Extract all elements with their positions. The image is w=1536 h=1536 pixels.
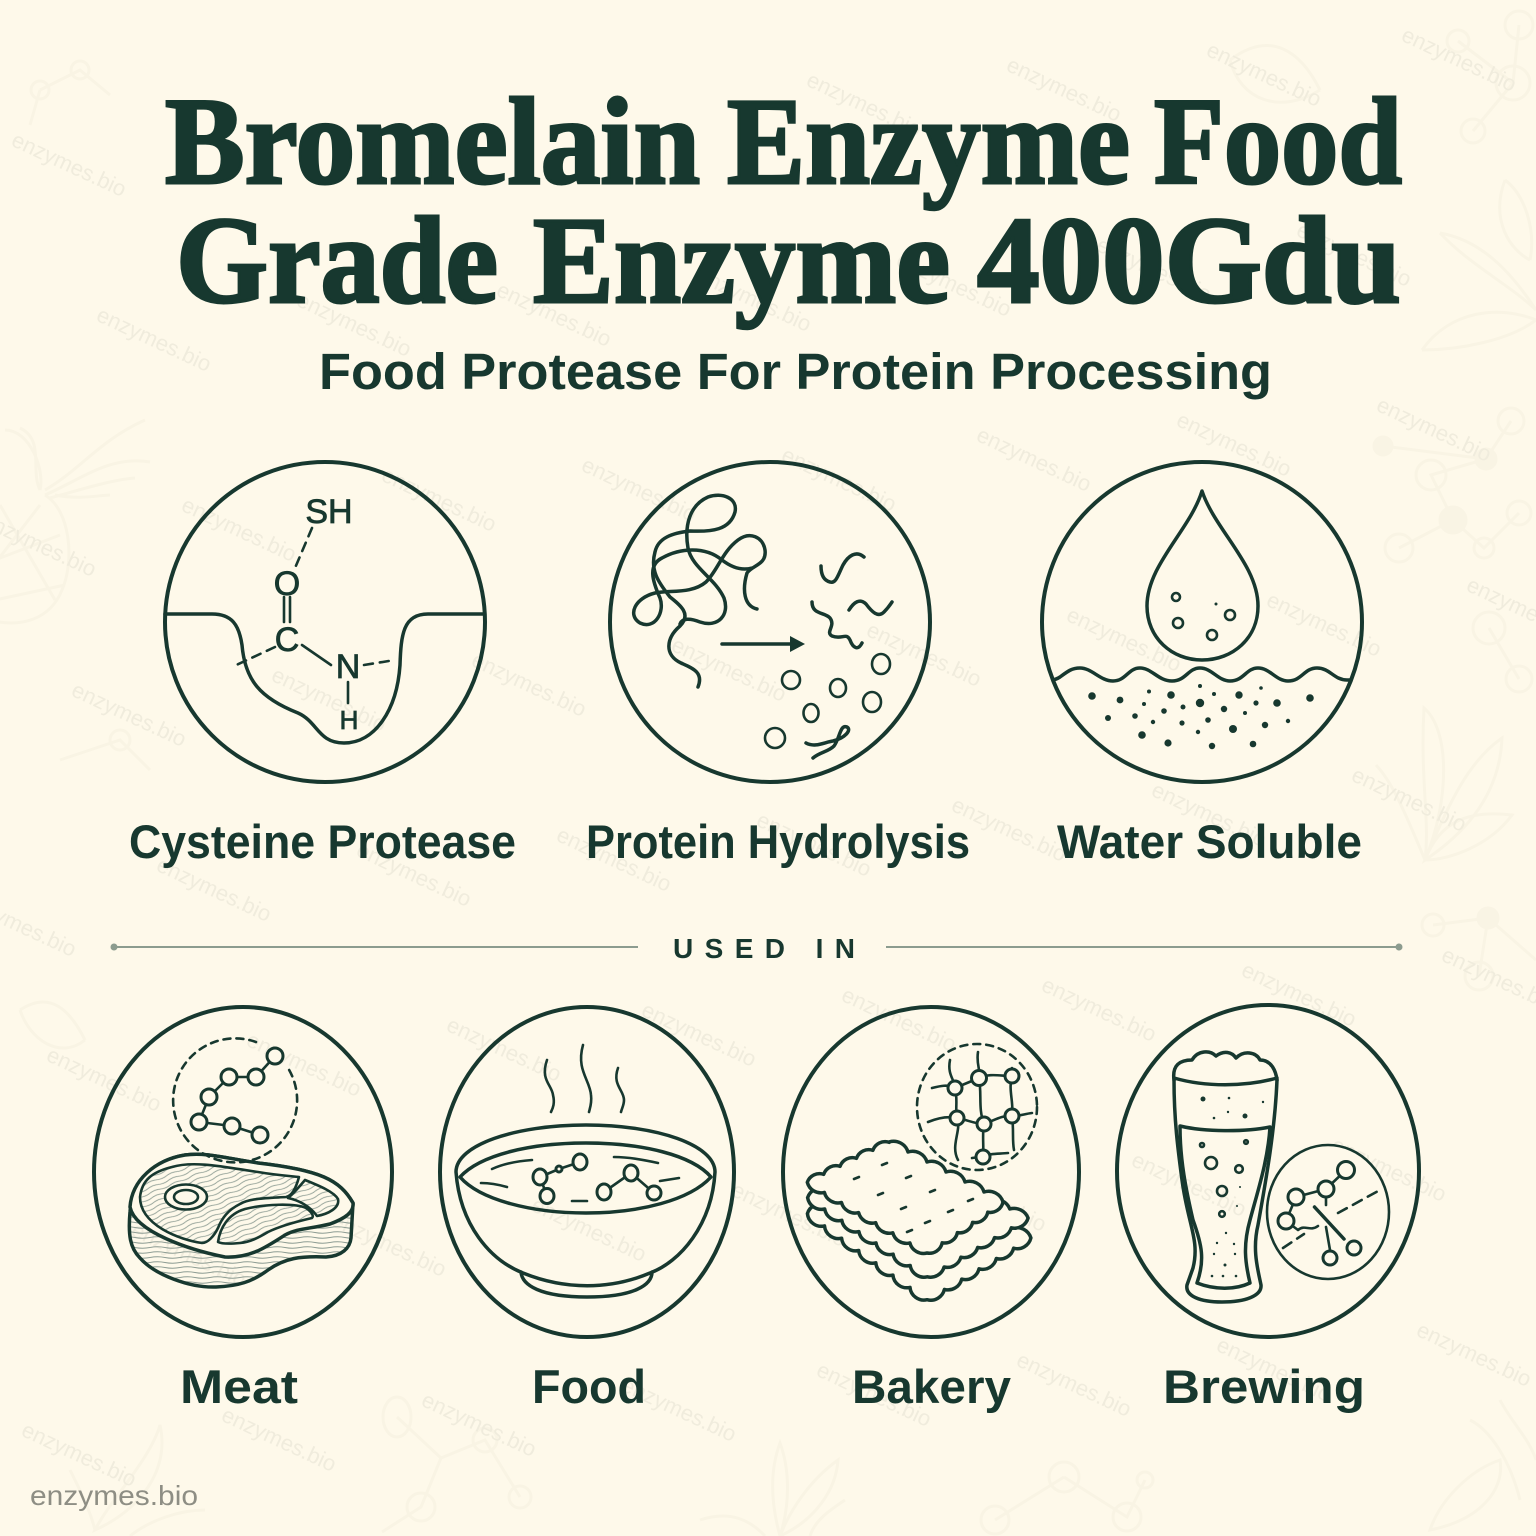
background watermark pattern: enzymes.bio [43, 1042, 165, 1117]
arrow [790, 636, 805, 652]
background watermark pattern: enzymes.bio [973, 422, 1095, 497]
background watermark pattern: enzymes.bio [8, 127, 130, 202]
label: brewing: Brewing [1163, 1360, 1365, 1413]
background watermark pattern: enzymes.bio [418, 1387, 540, 1462]
title [165, 73, 1402, 329]
background watermark pattern: enzymes.bio [693, 262, 815, 337]
background watermark pattern: enzymes.bio [68, 677, 190, 752]
background watermark pattern: enzymes.bio [93, 302, 215, 377]
background watermark pattern: enzymes.bio [18, 1417, 140, 1492]
background watermark pattern: enzymes.bio [1293, 217, 1415, 292]
panel: water soluble [1040, 462, 1362, 868]
background watermark pattern: enzymes.bio [1238, 957, 1360, 1032]
background watermark pattern: enzymes.bio [353, 837, 475, 912]
icon: steak with peptide chain [94, 1007, 392, 1337]
panel: meat [94, 1007, 392, 1413]
background watermark pattern: enzymes.bio [153, 852, 275, 927]
background watermark pattern: enzymes.bio [218, 1402, 340, 1477]
icon: crackers with gluten network [783, 1007, 1079, 1337]
title: Enzyme [533, 192, 950, 329]
icon: active site pocket with molecule: H [340, 705, 358, 735]
background watermark pattern: enzymes.bio [1263, 587, 1385, 662]
icon: active site pocket with molecule: N [336, 648, 360, 686]
footer watermark: enzymes.bio [30, 1480, 198, 1511]
background watermark pattern: enzymes.bio [863, 617, 985, 692]
icon: beer glass with cleavage inset [1117, 1005, 1419, 1337]
title: Grade [176, 192, 498, 329]
background watermark pattern: enzymes.bio [1413, 1317, 1535, 1392]
background watermark pattern: enzymes.bio [753, 807, 875, 882]
background watermark pattern: enzymes.bio [813, 1357, 935, 1432]
background watermark pattern: enzymes.bio [468, 647, 590, 722]
background watermark pattern: enzymes.bio [293, 287, 415, 362]
background watermark pattern: enzymes.bio [1328, 1132, 1450, 1207]
background watermark pattern: enzymes.bio [838, 982, 960, 1057]
background watermark pattern: enzymes.bio [578, 452, 700, 527]
label: water soluble: Water Soluble [1057, 815, 1362, 868]
background watermark pattern: enzymes.bio [948, 792, 1070, 867]
subtitle: Food Protease For Protein Processing [319, 343, 1272, 400]
icon: active site pocket with molecule [165, 462, 485, 782]
label: bakery: Bakery [852, 1360, 1011, 1413]
background watermark pattern: enzymes.bio [728, 1177, 850, 1252]
background watermark pattern: enzymes.bio [1213, 1332, 1335, 1407]
background watermark pattern: enzymes.bio [1013, 1347, 1135, 1422]
background watermark pattern: enzymes.bio [328, 1207, 450, 1282]
background watermark pattern: enzymes.bio [638, 997, 760, 1072]
icon: protein broken into fragments [610, 462, 930, 782]
icon: active site pocket with molecule: C [275, 621, 299, 659]
background watermark pattern: enzymes.bio [493, 277, 615, 352]
section divider: used in: USED IN [673, 933, 855, 964]
icon: water drop dissolving [1040, 462, 1362, 782]
background watermark pattern: enzymes.bio [528, 1192, 650, 1267]
panel: protein hydrolysis [586, 462, 970, 868]
background watermark pattern: enzymes.bio [1373, 392, 1495, 467]
background watermark pattern: enzymes.bio [443, 1012, 565, 1087]
title: Food [1154, 73, 1402, 210]
label: food: Food [532, 1360, 646, 1413]
background watermark pattern: enzymes.bio [1093, 232, 1215, 307]
background watermark pattern: enzymes.bio [778, 442, 900, 517]
background watermark pattern: enzymes.bio [1348, 762, 1470, 837]
background watermark pattern: enzymes.bio [1398, 22, 1520, 97]
title: 400Gdu [977, 192, 1401, 329]
title: Enzyme [727, 73, 1130, 210]
section divider: used in [110, 933, 1402, 964]
background watermark pattern: enzymes.bio [128, 1217, 250, 1292]
background watermark pattern: enzymes.bio [1128, 1147, 1250, 1222]
background watermark pattern: enzymes.bio [553, 822, 675, 897]
background watermark pattern: enzymes.bio [668, 632, 790, 707]
icon: active site pocket with molecule: SH [305, 493, 353, 531]
background watermark pattern: enzymes.bio [1203, 37, 1325, 112]
panel: bakery [783, 1007, 1079, 1413]
background watermark pattern: enzymes.bio [378, 462, 500, 537]
icon: soup bowl with molecules [440, 1007, 734, 1337]
background watermark pattern: enzymes.bio [1038, 972, 1160, 1047]
background watermark pattern: enzymes.bio [803, 67, 925, 142]
background watermark pattern: enzymes.bio [618, 1372, 740, 1447]
panel: cysteine protease [129, 462, 516, 868]
background watermark pattern: enzymes.bio [893, 247, 1015, 322]
background watermark pattern: enzymes.bio [243, 1027, 365, 1102]
panel: brewing [1117, 1005, 1419, 1413]
label: protein hydrolysis: Protein Hydrolysis [586, 815, 970, 868]
background watermark pattern: enzymes.bio [1148, 777, 1270, 852]
label: meat: Meat [180, 1360, 298, 1413]
background watermark pattern: enzymes.bio [268, 662, 390, 737]
background watermark pattern: enzymes.bio [178, 492, 300, 567]
background watermark pattern: enzymes.bio [1003, 52, 1125, 127]
background watermark pattern: enzymes.bio [1063, 602, 1185, 677]
icon: active site pocket with molecule: O [274, 565, 300, 603]
background watermark pattern: enzymes.bio [1173, 407, 1295, 482]
panel: food [440, 1007, 734, 1413]
background watermark pattern: enzymes.bio [928, 1162, 1050, 1237]
title: Bromelain [165, 73, 700, 210]
label: cysteine protease: Cysteine Protease [129, 815, 516, 868]
